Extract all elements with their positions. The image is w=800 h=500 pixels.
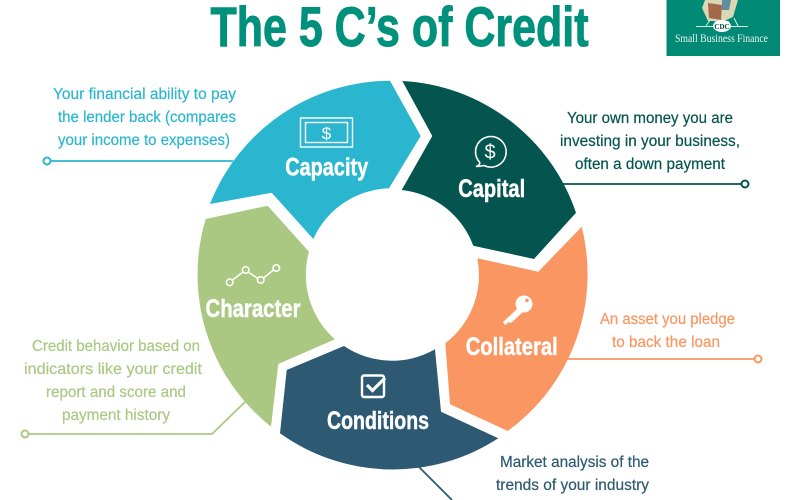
segment: capital [402,81,576,259]
callout: character: payment history [62,407,170,424]
logo: Small Business Finance [675,31,768,45]
segment: conditions [280,346,498,469]
icon: key [503,296,532,325]
label: character: Character [206,295,301,323]
callout: character: indicators like your credit [24,361,203,378]
callout: character [22,338,246,438]
icon: banknote [300,118,352,147]
callout: collateral: An asset you pledge [600,311,735,328]
callout: capital: Your own money you are [567,110,733,127]
label: conditions: Conditions [327,407,429,435]
callout: collateral [567,311,762,362]
callout: conditions: trends of your industry [496,477,649,494]
segment: capacity [210,81,421,239]
callout: capital [560,110,748,188]
icon: speech bubble dollar [476,137,506,167]
callout: character: Credit behavior based on [32,338,200,355]
icon: banknote: $ [322,124,332,143]
callout: capacity: your income to expenses) [58,132,230,149]
segment: character [198,206,335,427]
callout: capital: investing in your business, [560,133,740,150]
callout: conditions: Market analysis of the [500,454,649,471]
logo: CDC [714,23,730,31]
callout: character: report and score and [46,384,186,401]
segment: collateral [445,227,588,431]
icon: speech bubble dollar: $ [484,142,496,164]
label: collateral: Collateral [466,333,558,361]
callout: capital: often a down payment [575,156,726,173]
label: capacity: Capacity [285,154,368,182]
callout: capacity [44,86,236,164]
logo [666,0,780,56]
label: capital: Capital [458,175,525,203]
callout: collateral: to back the loan [612,334,720,351]
icon: checkbox [362,376,385,397]
callout: conditions [418,454,649,500]
callout: capacity: Your financial ability to pay [53,86,236,103]
icon: line chart [226,265,280,286]
callout: capacity: the lender back (compares [58,109,236,126]
